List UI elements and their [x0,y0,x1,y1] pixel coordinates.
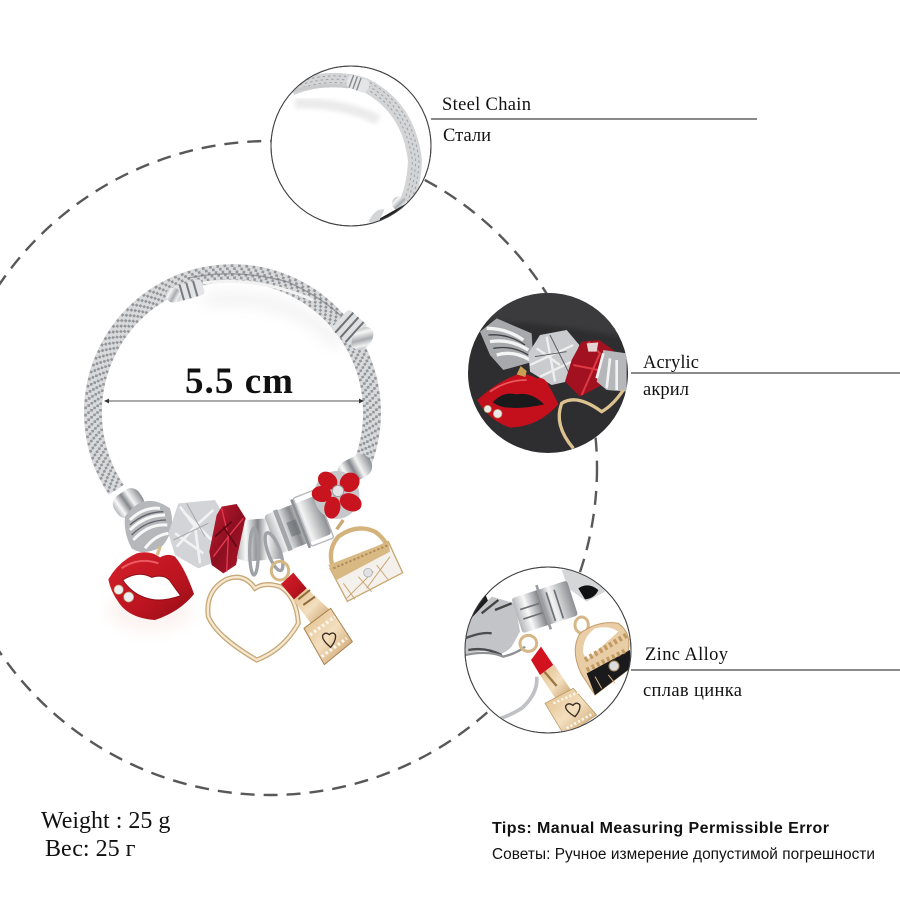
silver heart top [463,597,525,657]
leader line: zinc alloy [631,669,900,671]
overlapping strand streaks [188,274,343,318]
red crystal [565,340,613,397]
barrel cap right [331,309,378,355]
black bead parts [562,570,605,602]
inset circle: acrylic [468,293,628,453]
lips charm [108,552,194,620]
silver cylinder bead [262,490,334,559]
diameter label: 5.5 cm [185,361,293,402]
weight english: Weight : 25 g [41,808,170,834]
label: zinc alloy russian: сплав цинка [643,681,742,701]
tips russian: Советы: Ручное измерение допустимой погрешности [492,846,875,863]
twisted silver bead [125,501,172,552]
inset circle: steel chain [271,66,431,230]
bracelet cable ring [86,266,380,494]
silver right bead [597,350,627,392]
heart close-up [559,390,623,448]
lipstick close-up [520,635,597,737]
label: zinc alloy: Zinc Alloy [645,645,729,665]
silver spacer [237,518,283,562]
leader line: steel chain [431,118,757,120]
silver cylinder [512,581,578,633]
jump rings [157,520,343,575]
tips english: Tips: Manual Measuring Permissible Error [492,820,829,837]
weight russian: Вес: 25 г [45,836,136,862]
red crystal bead [209,504,246,573]
label: steel chain russian: Стали [443,126,491,146]
inset circle: zinc alloy [463,567,631,737]
dashed outer circle [0,141,597,795]
leader line: acrylic [631,372,900,374]
label: acrylic russian: акрил [643,380,689,400]
label: steel chain: Steel Chain [442,95,531,115]
small silver bead by flower [334,450,376,488]
cuff end cap left [164,279,205,305]
label: acrylic: Acrylic [643,353,699,373]
silver twisted bead [480,318,533,370]
silver heart wire [495,677,537,720]
lips close-up [477,366,558,428]
inner shadow of bracelet [295,103,378,120]
clear crystal [528,330,579,385]
clear crystal bead [168,500,222,568]
flower bead [311,468,365,520]
measurement arrow [104,399,364,403]
cable detail [292,80,415,202]
handbag close-up [575,617,630,695]
cuff end beads [346,75,370,92]
soft shadow under charms [108,298,340,632]
silver end bead [109,484,148,522]
charms cluster [108,450,403,665]
handbag charm [328,528,403,601]
textured dark cloth [486,293,620,339]
lipstick charm [271,561,352,665]
heart charm [208,577,298,660]
